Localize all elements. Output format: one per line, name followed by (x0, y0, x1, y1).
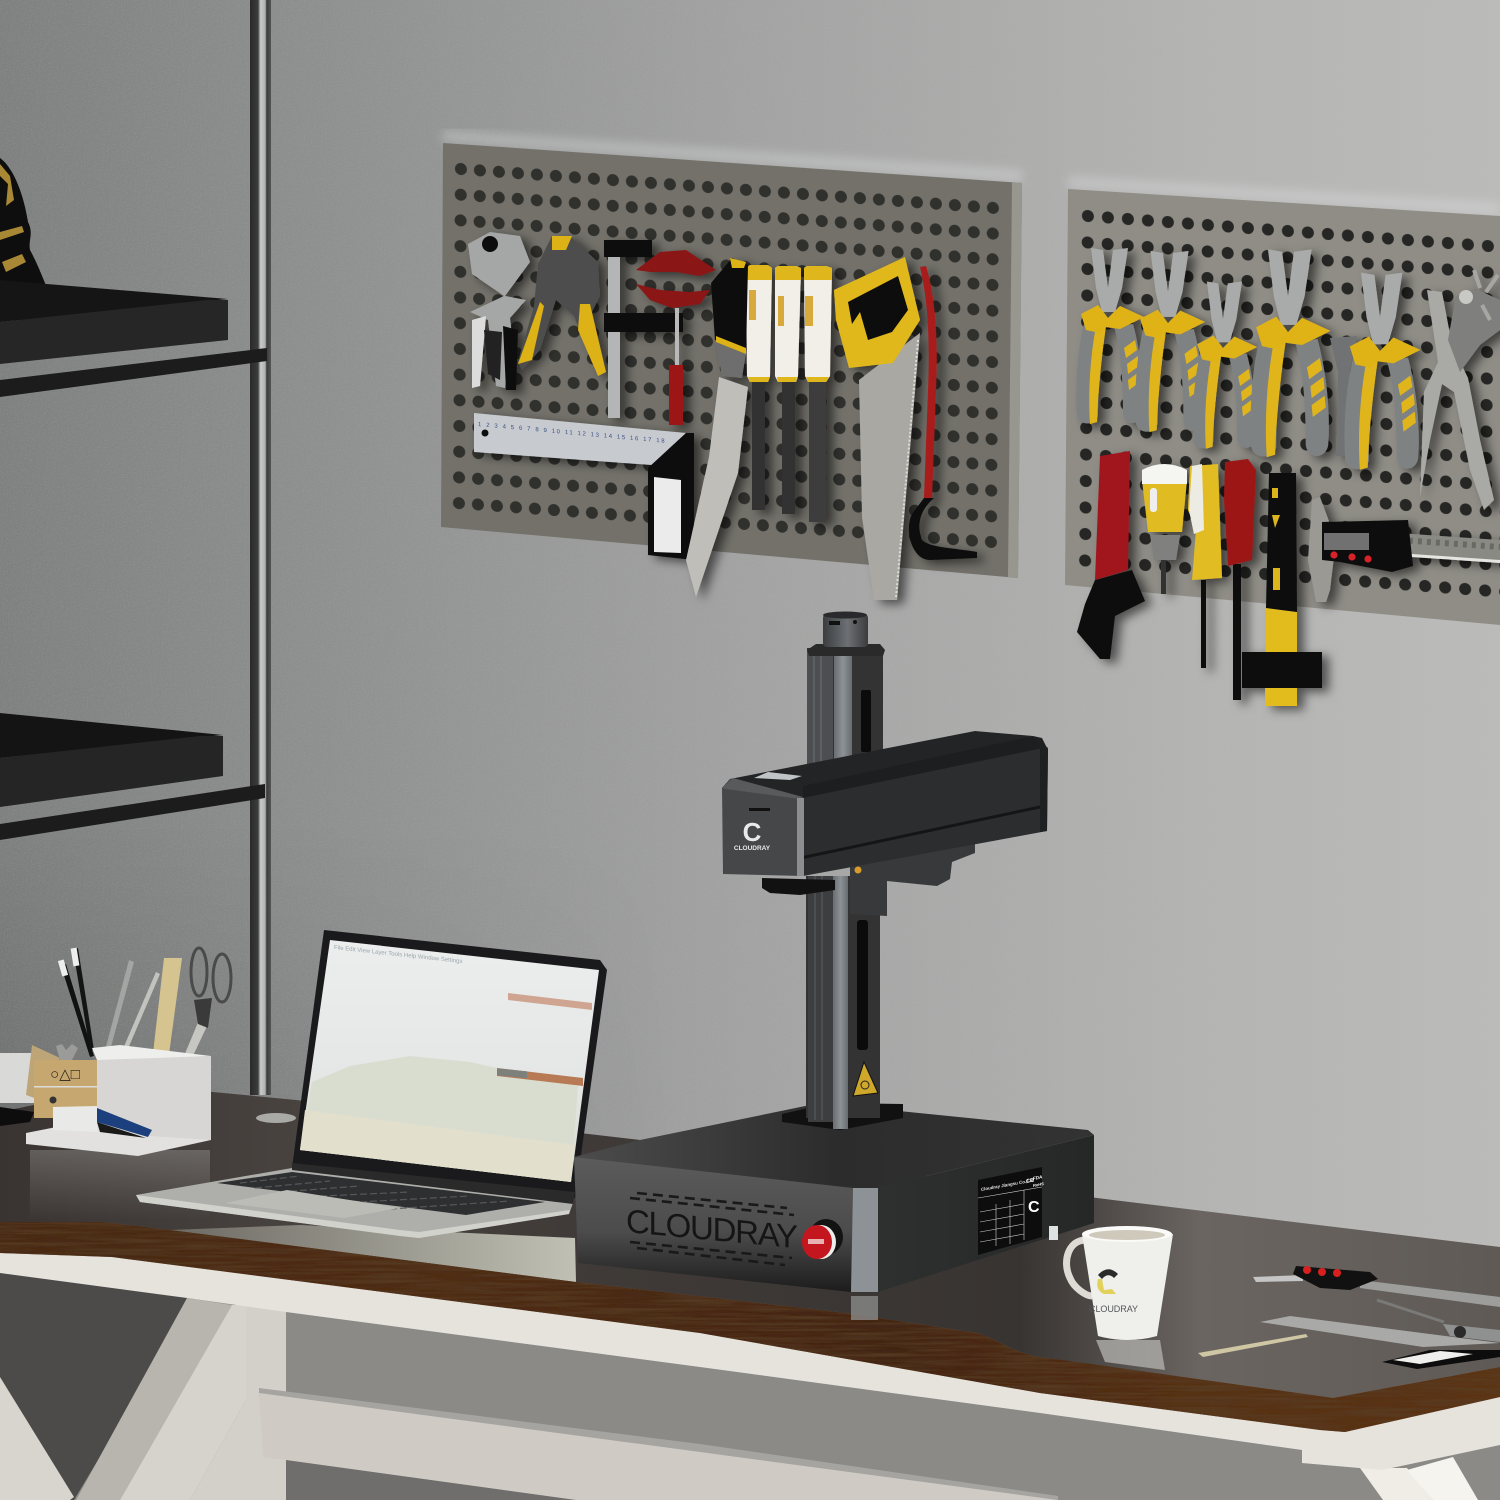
screen (300, 940, 599, 1182)
square handle (648, 433, 694, 560)
yellow stubby screwdriver (1142, 464, 1187, 594)
head logo (734, 817, 771, 852)
desk top (0, 1085, 1500, 1432)
screen frame (292, 930, 607, 1198)
spec label: CE (1026, 1178, 1034, 1185)
shelving unit (0, 0, 271, 1095)
galvo lens (762, 878, 835, 895)
base front panel (574, 1157, 853, 1292)
red hook wrench (909, 266, 977, 560)
screen: File Edit View Layer Tools Help Window Settings (334, 945, 462, 965)
spec label (978, 1167, 1044, 1255)
plier row (1076, 248, 1420, 470)
tan card back (26, 1045, 60, 1100)
tools on left board (468, 232, 977, 600)
organiser top rim (92, 1045, 211, 1060)
lower tray (0, 713, 223, 807)
red screwdriver (669, 308, 683, 425)
laptop reflection (170, 1225, 576, 1282)
brand name: CLOUDRAY (626, 1203, 798, 1256)
leather punch (1420, 270, 1500, 510)
red screwdriver (1224, 459, 1256, 700)
yellow white screwdriver (1188, 464, 1222, 668)
column foot (782, 1103, 903, 1130)
arm end cap (1033, 736, 1048, 832)
chisel set (746, 265, 832, 522)
trackpad (225, 1190, 399, 1218)
vertical post (190, 1305, 286, 1500)
pull saw (686, 258, 748, 597)
arm groove (803, 804, 1047, 859)
pegboard left (441, 143, 1022, 600)
arm top face (722, 731, 1033, 798)
right leg back (1407, 1457, 1478, 1500)
base right panel (878, 1135, 1094, 1292)
hinge (292, 1163, 575, 1204)
organiser cube (97, 1056, 211, 1140)
steel square ruler: 1 2 3 4 5 6 7 8 9 10 11 12 13 14 15 16 17 18 (478, 422, 666, 445)
wooden stick (1198, 1334, 1308, 1357)
steel square ruler (474, 413, 686, 465)
red clamp jaws (636, 250, 716, 308)
binder clip (56, 1044, 78, 1060)
arm side face (803, 736, 1048, 876)
black device far left (0, 1107, 34, 1126)
pegboard right (1065, 189, 1500, 706)
spec label: C (1028, 1199, 1040, 1216)
cable grommet (256, 1113, 296, 1123)
desk square (1382, 1350, 1500, 1369)
emergency stop button (802, 1219, 843, 1259)
spec label: FDA (1033, 1174, 1043, 1181)
white object far left (0, 1053, 36, 1103)
apron (0, 1253, 1500, 1470)
screen orange panel bar (508, 993, 592, 1010)
lower stretcher shadow (259, 1388, 1058, 1500)
clip box (53, 1106, 97, 1132)
golden skull ornament (0, 158, 56, 320)
spec label: Cloudray Jiangsu Co.,Ltd (981, 1177, 1034, 1192)
spec label: RoHS (1033, 1181, 1044, 1188)
base silver corner (851, 1188, 878, 1292)
laptop (136, 930, 607, 1238)
screen toolbar bar (497, 1068, 583, 1086)
diagonal brace front (120, 1305, 246, 1500)
arm slot (749, 808, 770, 811)
desk organiser (0, 948, 231, 1156)
column cap flange (807, 644, 885, 656)
F clamp (604, 240, 683, 418)
QR sticker (1049, 1226, 1058, 1240)
arm front face (722, 779, 803, 876)
indicator lamp (854, 866, 862, 874)
upper tray (0, 280, 228, 364)
pencils and tools (58, 948, 231, 1062)
shelf post (250, 0, 271, 1095)
laser marking machine (574, 612, 1094, 1292)
upper shelf bar (0, 348, 267, 397)
diagonal brace (76, 1298, 232, 1500)
digital caliper (1308, 497, 1500, 602)
head logo: C (743, 817, 762, 847)
base top surface (574, 1103, 1094, 1188)
hand saw (834, 257, 920, 600)
desk caliper (1253, 1266, 1500, 1307)
head logo: CLOUDRAY (734, 845, 771, 852)
coffee mug (1067, 1226, 1173, 1340)
machine reflection (851, 1296, 878, 1320)
vent dashes (630, 1193, 794, 1265)
laptop front lip (136, 1195, 570, 1238)
desk frame white (0, 1253, 1500, 1500)
arm silver trims (797, 798, 804, 876)
right leg (1360, 1468, 1433, 1500)
mug reflection (1096, 1340, 1165, 1370)
tan card: ○△□ (50, 1066, 80, 1083)
desk ruler (1260, 1316, 1500, 1347)
hammer (1242, 473, 1322, 706)
spring clamp (518, 236, 606, 376)
top knob (823, 612, 868, 647)
bracket below arm (850, 843, 975, 916)
arm top bevel (803, 736, 1043, 798)
mug logo: CLOUDRAY (1089, 1304, 1138, 1314)
stapler (97, 1108, 152, 1138)
red scraper (1077, 451, 1145, 659)
arm display window (754, 772, 802, 780)
laser warning triangle (853, 1062, 878, 1096)
organiser reflection (30, 1150, 210, 1220)
keyboard (217, 1172, 545, 1215)
desk compass (1377, 1300, 1500, 1342)
pliers silver (468, 232, 530, 390)
desk edge wood (0, 1222, 1500, 1432)
left leg (0, 1377, 74, 1500)
organiser base (26, 1120, 211, 1156)
tools on right board (1076, 248, 1500, 706)
lower column (806, 876, 880, 1129)
wall under desk (0, 1250, 1500, 1500)
lower shelf bar (0, 784, 265, 840)
screen landscape (300, 1056, 578, 1182)
upper column (807, 648, 883, 770)
tan card (34, 1060, 97, 1118)
laptop base (136, 1168, 573, 1238)
lower stretcher (259, 1393, 1058, 1500)
